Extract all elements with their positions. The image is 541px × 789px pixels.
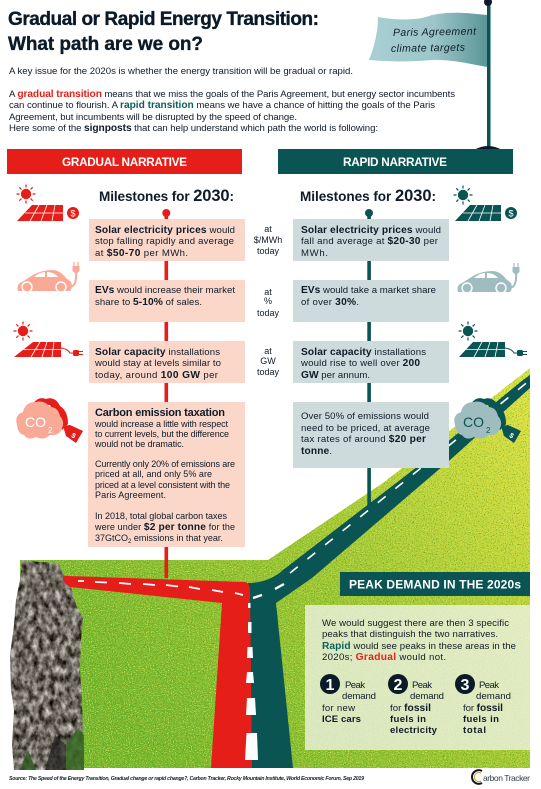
gradual box: carbon taxation: to current levels, but the difference	[95, 429, 229, 439]
milestones heading: gradual: Milestones for 2030:	[99, 187, 234, 205]
road: rapid (teal)	[248, 375, 530, 768]
landscape: grass hill	[20, 360, 530, 768]
logo: Carbon Tracker: arbon Tracker	[483, 773, 530, 783]
peak 3	[455, 674, 511, 736]
icon: solar capacity rapid	[458, 322, 527, 357]
intro text: Rapid would see peaks in these areas in the	[322, 641, 516, 652]
peak 3: for fossil	[463, 703, 503, 714]
gradual box: carbon taxation: 37GtCO	[95, 533, 128, 543]
rapid box: EVs	[293, 280, 449, 322]
heading: peak demand: PEAK DEMAND IN THE 2020s	[349, 578, 521, 592]
icon: carbon tax rapid: CO	[463, 414, 484, 430]
rapid box: solar prices: fall and average at $20-30 per	[301, 236, 439, 247]
gradual box: carbon taxation: would increase a little with respect	[94, 419, 228, 429]
middle labels: today's values: at	[264, 287, 272, 297]
middle labels: today's values: today	[257, 308, 280, 318]
middle labels: today's values: today	[257, 246, 280, 256]
intro text	[322, 618, 516, 663]
gradual box: carbon taxation: Currently only 20% of emissions are	[95, 459, 235, 469]
gradual box: carbon taxation: would not be dramatic.	[94, 439, 184, 449]
icon: carbon tax rapid: 2	[486, 426, 491, 435]
gradual box: carbon taxation: Carbon emission taxation	[95, 407, 225, 419]
logo: Carbon Tracker	[472, 770, 530, 784]
rapid box: solar prices	[293, 219, 449, 261]
gradual box: carbon taxation: emissions in that year.	[131, 533, 223, 543]
title	[8, 9, 319, 55]
peak 1: for new	[322, 703, 355, 714]
rapid box: solar capacity: would rise to well over 200	[300, 358, 420, 369]
rapid box: solar capacity: Solar capacity installations	[301, 347, 426, 358]
icon: solar capacity gradual	[14, 322, 83, 357]
gradual box: solar prices: at $50-70 per MWh.	[95, 248, 188, 259]
header: gradual narrative	[7, 149, 242, 174]
peak 1	[320, 674, 376, 725]
gradual box: carbon taxation: were under $2 per tonne for the	[94, 522, 235, 533]
intro text: 2020s; Gradual would not.	[322, 652, 446, 663]
rapid box: solar prices: MWh.	[301, 248, 328, 259]
rapid box: carbon pricing	[293, 402, 449, 468]
middle labels: today's values: GW	[260, 356, 276, 366]
rapid box: solar capacity	[293, 341, 449, 383]
intro text: can continue to flourish. A rapid transition means we have a chance of hitting the goals of the Paris	[9, 100, 435, 111]
peak 2: 2	[394, 677, 403, 694]
road: gradual (red)	[63, 576, 258, 768]
peak 2: fuels in	[390, 714, 426, 725]
rapid box: solar capacity: GW per annum.	[301, 370, 370, 381]
gradual box: carbon taxation: priced at all, and only 5% are	[95, 469, 212, 479]
peak 2: electricity	[390, 725, 438, 736]
peak 2: Peak	[412, 680, 432, 691]
flag: Paris Agreement climate targets	[369, 0, 502, 150]
gradual box: solar prices: Solar electricity prices would	[95, 225, 235, 236]
gradual box: EVs: share to 5-10% of sales.	[95, 297, 202, 308]
gradual box: carbon taxation: In 2018, total global carbon taxes	[95, 511, 228, 521]
icon: solar price rapid	[454, 186, 517, 221]
intro text: We would suggest there are then 3 specific	[322, 618, 509, 629]
intro text: peaks that distinguish the two narratives.	[322, 629, 498, 640]
peak 1: ICE cars	[322, 714, 361, 725]
title: Gradual or Rapid Energy Transition:	[8, 9, 319, 30]
middle labels: today's values	[254, 224, 282, 377]
intro text: Here some of the signposts that can help understand which path the world is following:	[9, 123, 378, 134]
panel: peak demand	[305, 605, 530, 750]
gradual box: solar capacity: today, around 100 GW per	[95, 370, 219, 381]
gradual box: solar prices	[89, 219, 245, 261]
header: gradual narrative: GRADUAL NARRATIVE	[62, 155, 187, 169]
rapid box: carbon pricing: need to be priced, at average	[301, 423, 430, 434]
intro text: Agreement, but incumbents will be disrupted by the speed of change.	[9, 112, 297, 123]
rock cliff	[10, 560, 84, 770]
intro text: A key issue for the 2020s is whether the energy transition will be gradual or rapid.	[9, 66, 353, 77]
rapid box: carbon pricing: Over 50% of emissions would	[301, 411, 429, 422]
icon: carbon tax gradual: $	[70, 432, 77, 440]
milestones heading: rapid: Milestones for 2030:	[300, 187, 436, 205]
icon: electric car rapid	[458, 263, 520, 293]
gradual box: EVs	[89, 280, 245, 322]
peak 3: fuels in	[463, 714, 499, 725]
icon: carbon tax rapid: $	[508, 432, 515, 440]
header: rapid narrative: RAPID NARRATIVE	[343, 155, 447, 169]
peak 1: 1	[326, 677, 335, 694]
middle labels: today's values: today	[257, 367, 280, 377]
source note: Source: The Speed of the Energy Transition, Gradual change or rapid change?, Carbon Tracker, Rocky Mountain Institute, World Economic Forum, Sep 2019	[9, 776, 364, 782]
peak 3: Peak	[479, 680, 499, 691]
gradual box: solar capacity: Solar capacity installations	[95, 347, 220, 358]
peak 1: Peak	[345, 680, 365, 691]
icon: solar price gradual: $	[70, 208, 76, 218]
flag: Paris Agreement climate targets: climate targets	[391, 42, 466, 55]
peak 2	[388, 674, 444, 736]
title: What path are we on?	[8, 34, 203, 55]
middle labels: today's values: at	[264, 224, 272, 234]
peak 2: demand	[410, 691, 444, 702]
gradual box: solar capacity	[89, 341, 245, 383]
gradual box: solar capacity: would stay at levels similar to	[94, 358, 221, 369]
gradual box: carbon taxation: Paris Agreement.	[95, 490, 166, 500]
gradual box: carbon taxation: 2	[128, 539, 132, 545]
gradual box: EVs: EVs would increase their market	[95, 285, 235, 296]
middle labels: today's values: %	[264, 296, 272, 306]
rapid box: EVs: EVs would take a market share	[301, 285, 436, 296]
intro text: A gradual transition means that we miss the goals of the Paris Agreement, but energy sector incumbents	[9, 89, 455, 100]
peak 3: total	[463, 725, 486, 736]
icon: solar price gradual	[16, 184, 79, 221]
rapid box: EVs: of over 30%.	[301, 297, 359, 308]
peak 2: for fossil	[390, 703, 431, 714]
gradual box: solar prices: stop falling rapidly and average	[95, 236, 234, 247]
rapid box: carbon pricing: tax rates of around $20 per	[301, 434, 426, 445]
icon: carbon tax rapid	[454, 398, 521, 443]
stem: gradual timeline	[162, 209, 170, 578]
middle labels: today's values: $/MWh	[254, 235, 282, 245]
peak 1: demand	[342, 691, 376, 702]
icon: electric car gradual	[18, 262, 80, 292]
heading: peak demand	[340, 572, 530, 596]
icon: carbon tax gradual: CO	[25, 414, 46, 430]
stem: rapid timeline	[365, 209, 373, 509]
header: rapid narrative	[278, 149, 513, 174]
intro text	[9, 66, 455, 134]
peak 3: demand	[476, 691, 511, 702]
middle labels: today's values: at	[264, 346, 272, 356]
rapid box: solar prices: Solar electricity prices would	[301, 225, 441, 236]
icon: carbon tax gradual	[16, 398, 83, 443]
gradual box: carbon taxation	[88, 402, 245, 547]
gradual box: carbon taxation: priced at a level consistent with the	[95, 480, 230, 490]
icon: solar price rapid: $	[508, 208, 514, 218]
flag: Paris Agreement climate targets: Paris Agreement	[393, 26, 477, 39]
peak 3: 3	[461, 677, 470, 694]
icon: carbon tax gradual: 2	[48, 426, 53, 435]
rapid box: carbon pricing: tonne.	[301, 446, 332, 457]
